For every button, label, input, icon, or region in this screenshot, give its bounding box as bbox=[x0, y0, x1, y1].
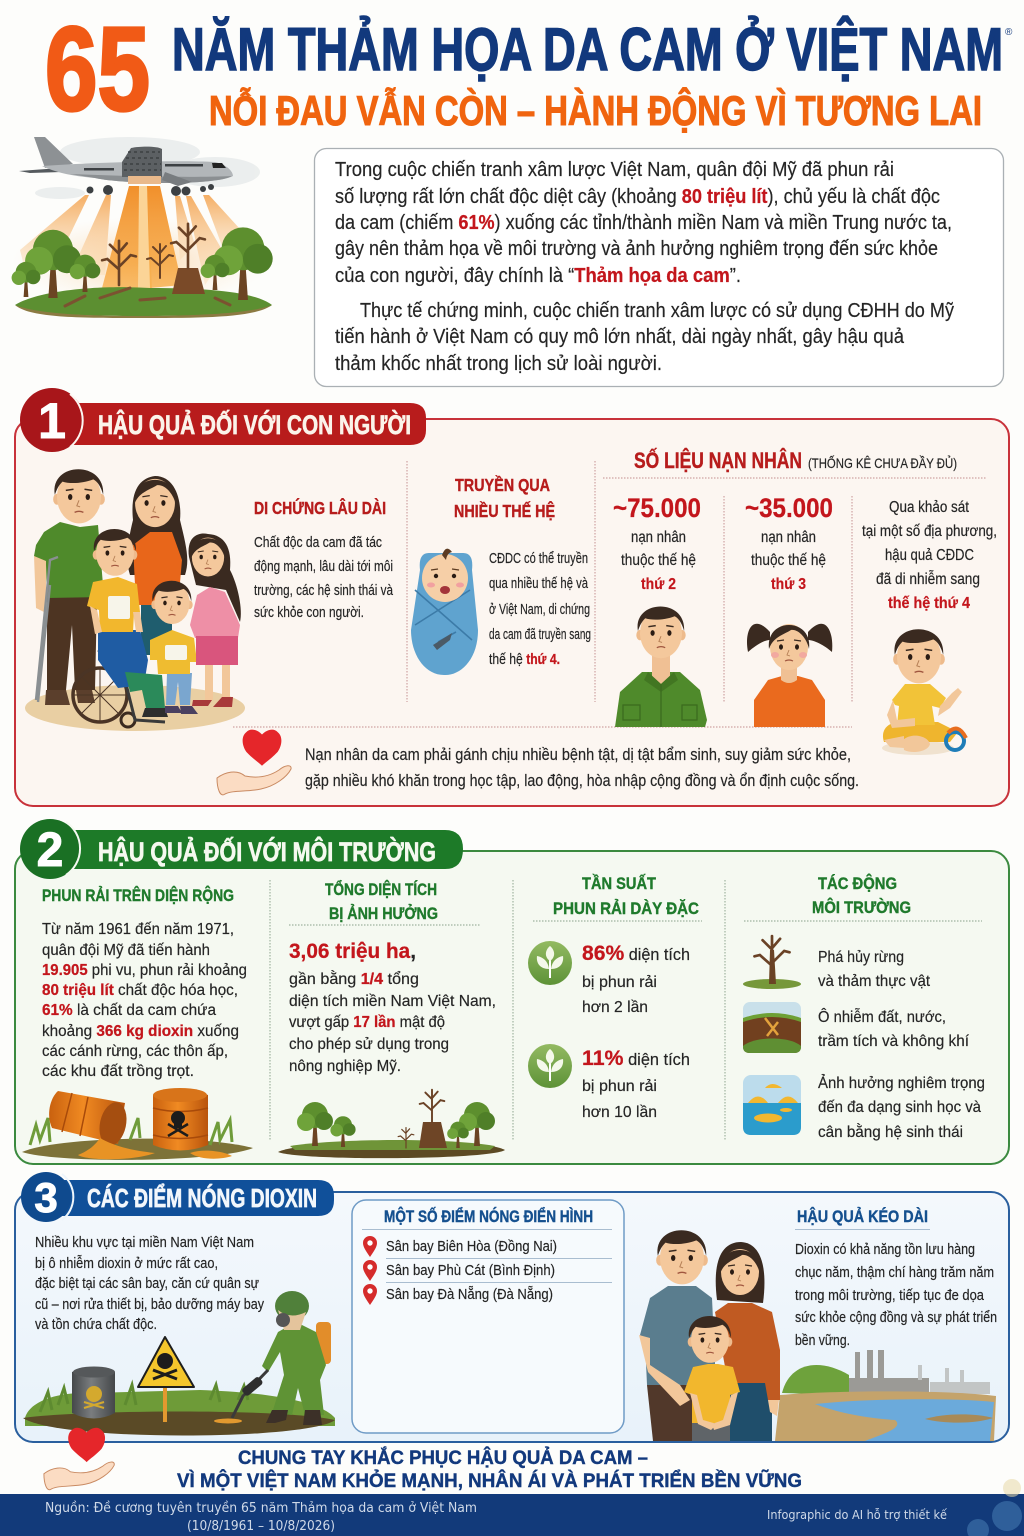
block: environmental impact: Phá hủy rừng bbox=[818, 949, 904, 966]
intro text: thảm khốc nhất trong lịch sử loài người. bbox=[335, 353, 662, 375]
stat: 11 percent bbox=[528, 1044, 690, 1121]
footer band: Nguồn: Đề cương tuyên truyền 65 năm Thảm họa da cam ở Việt Nam bbox=[45, 1499, 477, 1516]
block: wide area spraying: 19.905 phi vu, phun rải khoảng bbox=[42, 962, 247, 979]
intro text: số lượng rất lớn chất độc diệt cây (khoảng 80 triệu lít), chủ yếu là chất độc bbox=[335, 186, 940, 208]
intro text panel bbox=[314, 148, 1004, 386]
block: environmental impact: trầm tích và không khí bbox=[818, 1033, 970, 1050]
block: total affected area: cho phép sử dụng trong bbox=[289, 1036, 449, 1053]
stat: fourth generation bbox=[862, 499, 997, 755]
block: long term effects: sức khỏe con người. bbox=[254, 605, 364, 621]
block: long lasting consequences: bền vững. bbox=[795, 1333, 850, 1349]
stat: 75000 victims second generation: thứ 2 bbox=[641, 576, 676, 593]
panel: section 3 dioxin hotspots bbox=[15, 1172, 1009, 1442]
block: long lasting consequences: Dioxin có khả năng tồn lưu hàng bbox=[795, 1242, 975, 1258]
text: polluted areas: đặc biệt tại các sân bay, căn cứ quân sự bbox=[35, 1276, 259, 1292]
intro text: của con người, đây chính là “Thảm họa da cam”. bbox=[335, 265, 741, 287]
stat: 75000 victims second generation: ~75.000 bbox=[613, 493, 701, 523]
intro text: da cam (chiếm 61%) xuống các tỉnh/thành miền Nam và miền Trung nước ta, bbox=[335, 212, 952, 234]
stat: 11 percent: 11% diện tích bbox=[582, 1046, 690, 1070]
block: long lasting consequences: HẬU QUẢ KÉO DÀI bbox=[797, 1207, 928, 1226]
call to action bbox=[177, 1445, 802, 1492]
intro text: gây nên thảm họa về môi trường và ảnh hưởng nghiêm trọng đến sức khỏe bbox=[335, 238, 938, 260]
stat: 35000 victims third generation: nạn nhân bbox=[761, 529, 816, 546]
block: spray frequency: PHUN RẢI DÀY ĐẶC bbox=[553, 899, 699, 918]
block: long lasting consequences bbox=[795, 1207, 997, 1349]
icon: dead tree bbox=[743, 936, 801, 989]
block: victim statistics bbox=[613, 447, 997, 755]
icon: hand holding heart bbox=[44, 1428, 114, 1490]
block: environmental impact: TÁC ĐỘNG bbox=[818, 874, 897, 893]
block: long lasting consequences: chục năm, thậm chí hàng trăm năm bbox=[795, 1265, 994, 1281]
footer band: (10/8/1961 – 10/8/2026) bbox=[187, 1518, 335, 1534]
block: total affected area: gần bằng 1/4 tổng bbox=[289, 969, 419, 988]
block: total affected area: BỊ ẢNH HƯỞNG bbox=[329, 904, 438, 923]
intro text: Trong cuộc chiến tranh xâm lược Việt Nam, quân đội Mỹ đã phun rải bbox=[335, 159, 894, 181]
title: 65 bbox=[45, 3, 150, 136]
text: polluted areas bbox=[35, 1235, 265, 1333]
text: polluted areas: bị ô nhiễm dioxin ở mức rất cao, bbox=[35, 1255, 218, 1272]
block: environmental impact: Ảnh hưởng nghiêm trọng bbox=[818, 1073, 985, 1092]
footer band: Infographic do AI hỗ trợ thiết kế bbox=[767, 1507, 947, 1522]
block: long term effects: trường, các hệ sinh thái và bbox=[254, 583, 394, 599]
statistics heading: SỐ LIỆU NẠN NHÂN bbox=[634, 447, 802, 473]
block: long term effects bbox=[254, 497, 394, 621]
section 2 header bbox=[20, 819, 463, 879]
illustration: damaged forest landscape bbox=[278, 1090, 505, 1158]
stat: 86 percent: 86% diện tích bbox=[582, 941, 690, 965]
panel: typical hotspots: MỘT SỐ ĐIỂM NÓNG ĐIỂN HÌNH bbox=[384, 1206, 593, 1226]
block: multi-generation transmission: CĐDC có thể truyền bbox=[489, 551, 588, 567]
block: wide area spraying: Từ năm 1961 đến năm 1971, bbox=[42, 921, 234, 938]
block: total affected area: vượt gấp 17 lần mật độ bbox=[289, 1014, 445, 1031]
block: wide area spraying: 80 triệu lít chất độc hóa học, bbox=[42, 982, 238, 999]
block: environmental impact: MÔI TRƯỜNG bbox=[812, 898, 911, 917]
block: environmental impact: đến đa dạng sinh học và bbox=[818, 1099, 981, 1116]
hotspot item: Bien Hoa bbox=[363, 1236, 557, 1257]
section 3 header: CÁC ĐIỂM NÓNG DIOXIN bbox=[87, 1183, 317, 1213]
section 2 header: HẬU QUẢ ĐỐI VỚI MÔI TRƯỜNG bbox=[98, 835, 436, 867]
block: long lasting consequences: trong môi trường, tiếp tục đe dọa bbox=[795, 1288, 985, 1304]
illustration: worried family bbox=[639, 1230, 780, 1441]
illustration: plane spraying over forest bbox=[12, 137, 273, 318]
title: ® bbox=[1005, 27, 1013, 38]
icon: polluted soil bbox=[743, 1002, 801, 1053]
stat: 86 percent: bị phun rải bbox=[582, 974, 657, 991]
block: multi-generation transmission: NHIỀU THẾ HỆ bbox=[454, 500, 555, 521]
block: long term effects: DI CHỨNG LÂU DÀI bbox=[254, 497, 386, 518]
block: multi-generation transmission: thế hệ thứ 4. bbox=[489, 652, 560, 668]
stat: 35000 victims third generation: thuộc thế hệ bbox=[751, 552, 826, 569]
block: wide area spraying: PHUN RẢI TRÊN DIỆN RỘNG bbox=[42, 886, 234, 905]
footer band bbox=[0, 1479, 1024, 1536]
text: polluted areas: và tồn chứa chất độc. bbox=[35, 1317, 157, 1333]
title bbox=[45, 3, 1013, 136]
intro text: Thực tế chứng minh, cuộc chiến tranh xâm lược có sử dụng CĐHH do Mỹ bbox=[360, 300, 954, 322]
illustration: adult man bust bbox=[615, 606, 707, 727]
section 1 header: 1 bbox=[38, 393, 66, 449]
illustration: family of victims bbox=[25, 469, 245, 731]
block: total affected area: diện tích miền Nam Việt Nam, bbox=[289, 993, 496, 1010]
block: multi-generation transmission: ở Việt Nam, di chứng bbox=[489, 602, 590, 618]
stat: 86 percent bbox=[528, 941, 690, 1016]
stat: fourth generation: tại một số địa phương, bbox=[862, 523, 997, 540]
text: polluted areas: cũ – nơi rửa thiết bị, bảo dưỡng máy bay bbox=[35, 1297, 265, 1313]
intro text: tiến hành ở Việt Nam có quy mô lớn nhất, dài ngày nhất, gây hậu quả bbox=[335, 326, 905, 348]
stat: 75000 victims second generation: thuộc thế hệ bbox=[621, 552, 696, 569]
block: environmental impact: và thảm thực vật bbox=[818, 973, 931, 990]
hotspot item: Da Nang: Sân bay Đà Nẵng (Đà Nẵng) bbox=[386, 1286, 553, 1303]
stat: 11 percent: hơn 10 lần bbox=[582, 1104, 657, 1121]
illustration: sitting toddler bbox=[882, 629, 966, 755]
statistics heading: (THỐNG KÊ CHƯA ĐẦY ĐỦ) bbox=[808, 454, 957, 471]
section 1 header: HẬU QUẢ ĐỐI VỚI CON NGƯỜI bbox=[98, 408, 411, 440]
stat: 35000 victims third generation: thứ 3 bbox=[771, 576, 806, 593]
hotspot item: Bien Hoa: Sân bay Biên Hòa (Đồng Nai) bbox=[386, 1239, 557, 1255]
illustration: leaking barrels bbox=[22, 1088, 253, 1160]
callout text: victim hardships: Nạn nhân da cam phải gánh chịu nhiều bệnh tật, dị tật bẩm sinh, suy giảm sức khỏe, bbox=[305, 746, 851, 764]
block: spray frequency: TẦN SUẤT bbox=[582, 874, 657, 893]
hotspot item: Phu Cat: Sân bay Phù Cát (Bình Định) bbox=[386, 1263, 555, 1279]
block: multi-generation transmission: qua nhiều thế hệ và bbox=[489, 576, 589, 592]
block: multi-generation transmission: TRUYỀN QUA bbox=[455, 474, 550, 495]
block: total affected area: TỔNG DIỆN TÍCH bbox=[325, 880, 437, 899]
section 3 header bbox=[21, 1172, 334, 1222]
block: environmental impact bbox=[743, 874, 985, 1141]
stat: 75000 victims second generation: nạn nhân bbox=[631, 529, 686, 546]
block: wide area spraying: quân đội Mỹ đã tiến hành bbox=[42, 942, 210, 959]
callout: hand holding heart bbox=[217, 730, 291, 795]
block: environmental impact: cân bằng hệ sinh thái bbox=[818, 1122, 963, 1141]
block: wide area spraying bbox=[42, 886, 247, 1080]
panel: section 2 environment consequences bbox=[15, 819, 1009, 1164]
panel: section 1 human consequences bbox=[15, 388, 1009, 806]
callout text: victim hardships: gặp nhiều khó khăn trong học tập, lao động, hòa nhập cộng đồng và ổn định cuộc sống. bbox=[305, 772, 859, 790]
panel: typical hotspots bbox=[352, 1200, 624, 1433]
block: environmental impact: Ô nhiễm đất, nước, bbox=[818, 1007, 946, 1026]
call to action: CHUNG TAY KHẮC PHỤC HẬU QUẢ DA CAM – bbox=[238, 1445, 648, 1469]
section 1 header bbox=[20, 388, 426, 452]
stat: fourth generation: thế hệ thứ 4 bbox=[888, 595, 970, 612]
block: wide area spraying: các khu đất trồng trọt. bbox=[42, 1063, 194, 1080]
icon: polluted water bbox=[743, 1075, 801, 1135]
block: wide area spraying: 61% là chất da cam chứa bbox=[42, 1002, 216, 1019]
section 2 header: 2 bbox=[37, 824, 63, 877]
stat: 35000 victims third generation: ~35.000 bbox=[745, 493, 833, 523]
block: wide area spraying: khoảng 366 kg dioxin xuống bbox=[42, 1023, 239, 1040]
block: multi-generation transmission bbox=[454, 474, 591, 668]
intro text bbox=[335, 159, 954, 375]
stat: fourth generation: Qua khảo sát bbox=[889, 499, 970, 516]
callout text: victim hardships bbox=[305, 746, 859, 790]
illustration: girl bust bbox=[747, 624, 832, 727]
block: total affected area: nông nghiệp Mỹ. bbox=[289, 1058, 401, 1075]
block: multi-generation transmission: da cam đã truyền sang bbox=[489, 627, 591, 643]
stat: fourth generation: hậu quả CĐDC bbox=[885, 547, 974, 564]
icon: swaddled baby bbox=[411, 549, 478, 675]
block: long term effects: động mạnh, lâu dài tới môi bbox=[254, 559, 393, 575]
text: polluted areas: Nhiều khu vực tại miền Nam Việt Nam bbox=[35, 1235, 254, 1251]
stat: 86 percent: hơn 2 lần bbox=[582, 999, 648, 1016]
illustration: factory and polluted river bbox=[775, 1350, 996, 1441]
block: total affected area bbox=[289, 880, 496, 1075]
section 3 header: 3 bbox=[34, 1174, 58, 1221]
block: long term effects: Chất độc da cam đã tác bbox=[254, 535, 382, 551]
stat: 11 percent: bị phun rải bbox=[582, 1078, 657, 1095]
call to action: VÌ MỘT VIỆT NAM KHỎE MẠNH, NHÂN ÁI VÀ PHÁT TRIỂN BỀN VỮNG bbox=[177, 1468, 802, 1492]
stat: fourth generation: đã di nhiễm sang bbox=[876, 571, 980, 588]
hotspot item: Phu Cat bbox=[363, 1260, 555, 1281]
block: total affected area: 3,06 triệu ha, bbox=[289, 939, 416, 963]
hotspot item: Da Nang bbox=[363, 1284, 553, 1305]
illustration: dioxin cleanup worker bbox=[23, 1291, 335, 1436]
block: spray frequency bbox=[528, 874, 699, 1121]
statistics heading bbox=[634, 447, 957, 473]
stat: 75000 victims second generation bbox=[613, 493, 707, 727]
stat: 35000 victims third generation bbox=[745, 493, 833, 727]
block: wide area spraying: các cánh rừng, các thôn ấp, bbox=[42, 1043, 228, 1060]
